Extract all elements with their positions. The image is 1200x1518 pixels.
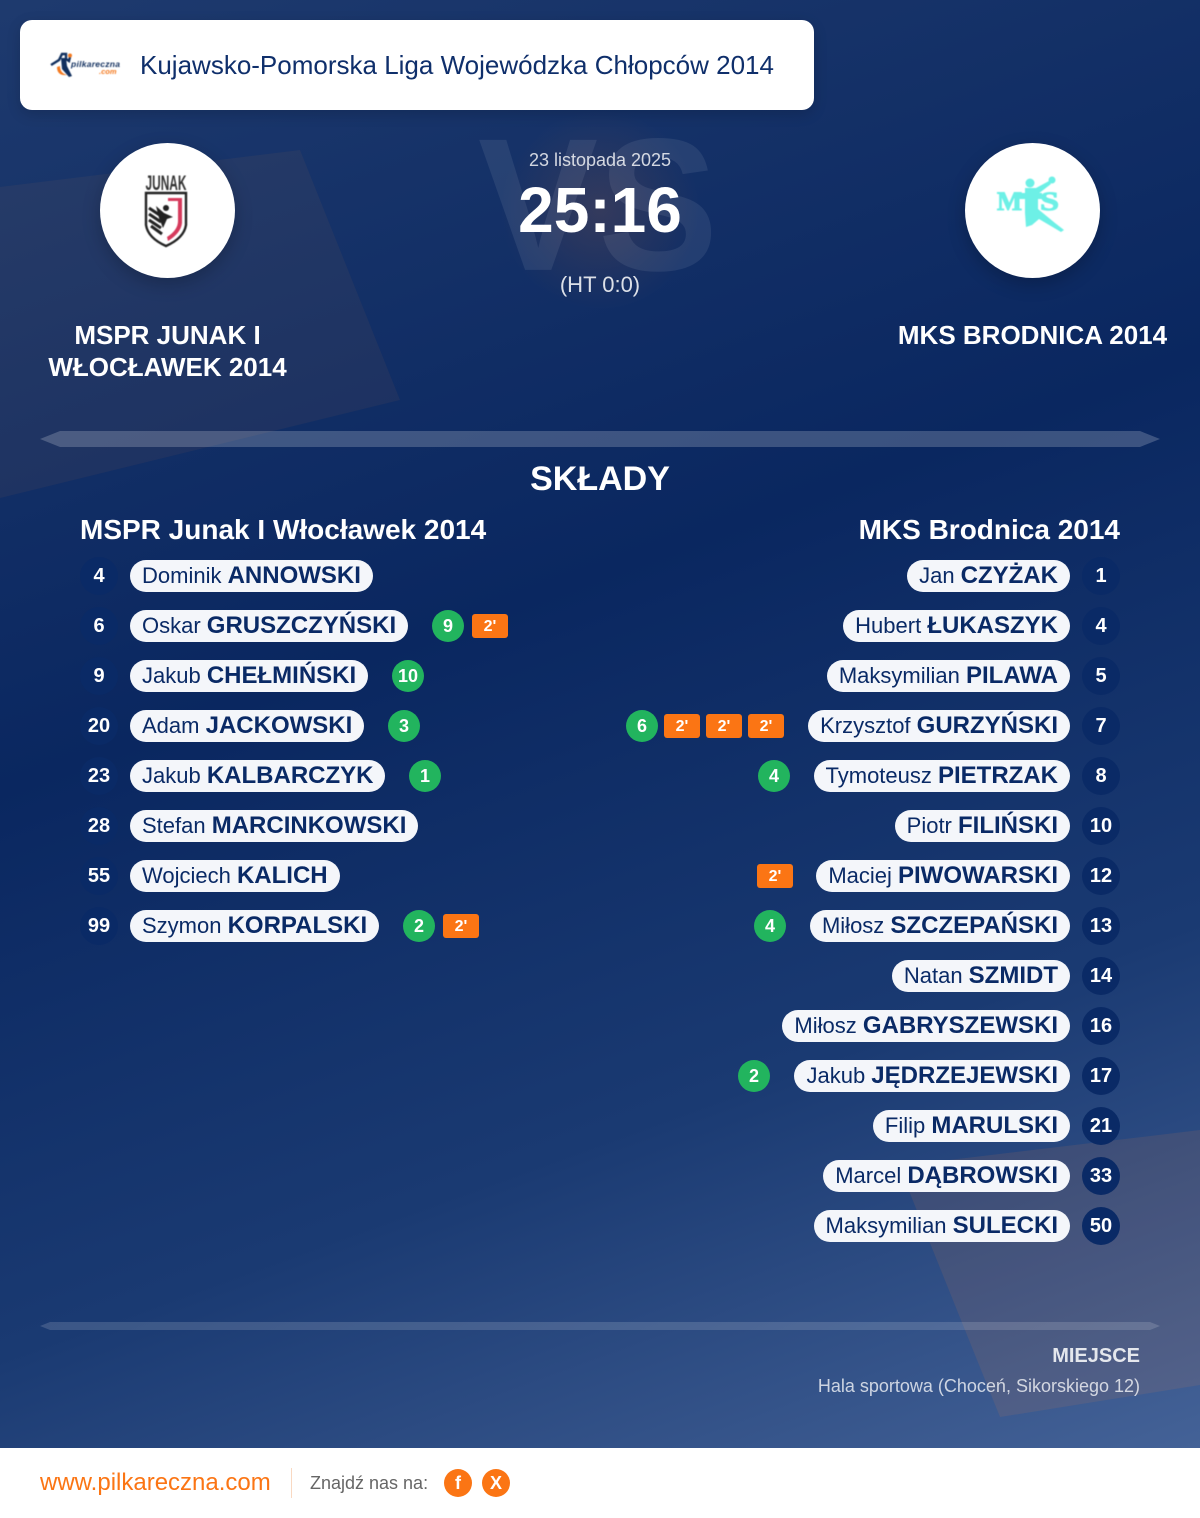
- player row: 4: [93, 565, 105, 587]
- player row: [88, 810, 418, 842]
- website: www.pilkareczna.com: [40, 1469, 271, 1496]
- player row: 23: [88, 765, 110, 787]
- player row: [626, 707, 1120, 745]
- player row: 5: [1095, 665, 1107, 687]
- half-time score: (HT 0:0): [560, 272, 640, 297]
- player row: [88, 710, 420, 742]
- player row: 2': [676, 718, 688, 735]
- player row: 1: [1095, 565, 1107, 587]
- player row: 1: [420, 766, 430, 786]
- player row: 50: [1090, 1215, 1112, 1237]
- logo: pilkareczna.com: .com: [99, 67, 117, 76]
- player row: [754, 907, 1120, 945]
- player row: Adam JACKOWSKI: [142, 712, 352, 739]
- player row: Maksymilian SULECKI: [826, 1212, 1058, 1239]
- player row: 4: [1095, 615, 1107, 637]
- player row: 33: [1090, 1165, 1112, 1187]
- player row: 2': [455, 918, 467, 935]
- player row: [757, 857, 1120, 895]
- player row: 14: [1090, 965, 1112, 987]
- player row: [873, 1107, 1120, 1145]
- player row: [738, 1057, 1120, 1095]
- player row: Dominik ANNOWSKI: [142, 562, 361, 589]
- player row: 2': [718, 718, 730, 735]
- player row: Miłosz SZCZEPAŃSKI: [822, 912, 1058, 939]
- player row: Filip MARULSKI: [885, 1112, 1058, 1139]
- player row: Jakub CHEŁMIŃSKI: [142, 662, 356, 689]
- player row: [782, 1007, 1120, 1045]
- player row: Natan SZMIDT: [904, 962, 1058, 989]
- player row: Marcel DĄBROWSKI: [835, 1162, 1058, 1189]
- away squad list: [626, 560, 1120, 1245]
- player row: 9: [93, 665, 105, 687]
- away squad heading: MKS Brodnica 2014: [859, 514, 1120, 545]
- player row: 99: [88, 915, 110, 937]
- player row: [93, 560, 373, 592]
- home squad list: [88, 560, 508, 942]
- player row: 21: [1090, 1115, 1112, 1137]
- icon: facebook: f: [455, 1473, 461, 1493]
- player row: Wojciech KALICH: [142, 862, 328, 889]
- player row: [814, 1207, 1120, 1245]
- player row: Tymoteusz PIETRZAK: [826, 762, 1058, 789]
- player row: 55: [88, 865, 110, 887]
- home team name: MSPR JUNAK I: [74, 320, 261, 350]
- player row: 2': [769, 868, 781, 885]
- player row: [895, 807, 1120, 845]
- venue text: Hala sportowa (Choceń, Sikorskiego 12): [818, 1376, 1140, 1396]
- player row: [907, 560, 1107, 592]
- divider bottom: [40, 1322, 1160, 1330]
- player row: Krzysztof GURZYŃSKI: [820, 712, 1058, 739]
- player row: Oskar GRUSZCZYŃSKI: [142, 612, 396, 639]
- player row: 20: [88, 715, 110, 737]
- player row: 7: [1095, 715, 1107, 737]
- icon: X: [482, 1469, 510, 1497]
- player row: [88, 760, 441, 792]
- player row: Maciej PIWOWARSKI: [828, 862, 1058, 889]
- player row: Stefan MARCINKOWSKI: [142, 812, 406, 839]
- follow label: Znajdź nas na:: [310, 1473, 428, 1493]
- player row: 28: [88, 815, 110, 837]
- away crest circle: [965, 143, 1100, 278]
- match date: 23 listopada 2025: [529, 150, 671, 170]
- away team name: MKS BRODNICA 2014: [898, 320, 1167, 350]
- player row: 2': [484, 618, 496, 635]
- player row: Jakub KALBARCZYK: [142, 762, 373, 789]
- player row: 6: [637, 716, 647, 736]
- score: 25:16: [518, 174, 682, 246]
- player row: Jan CZYŻAK: [919, 562, 1058, 589]
- player row: 13: [1090, 915, 1112, 937]
- player row: Miłosz GABRYSZEWSKI: [794, 1012, 1058, 1039]
- player row: 9: [443, 616, 453, 636]
- icon: X: X: [490, 1473, 502, 1493]
- player row: 3: [399, 716, 409, 736]
- footer: [0, 1448, 1200, 1518]
- icon: facebook: [444, 1469, 472, 1497]
- footer separator: [291, 1468, 292, 1498]
- icon: MKS crest: [996, 176, 1064, 232]
- player row: 6: [93, 615, 105, 637]
- player row: [758, 757, 1120, 795]
- icon: Junak crest: [144, 172, 188, 248]
- player row: Maksymilian PILAWA: [839, 662, 1058, 689]
- player row: 8: [1095, 765, 1107, 787]
- home team name: [48, 320, 287, 382]
- header card: [20, 20, 814, 110]
- player row: 10: [1090, 815, 1112, 837]
- player row: 2: [414, 916, 424, 936]
- player row: 4: [769, 766, 779, 786]
- player row: 17: [1090, 1065, 1112, 1087]
- player row: 4: [765, 916, 775, 936]
- player row: [827, 657, 1120, 695]
- home crest circle: [100, 143, 235, 278]
- player row: 10: [398, 666, 418, 686]
- player row: Szymon KORPALSKI: [142, 912, 367, 939]
- icon: MKS crest: S: [1040, 187, 1059, 216]
- icon: MKS crest: M: [997, 187, 1022, 216]
- player row: [843, 610, 1107, 644]
- player row: [88, 910, 479, 942]
- home squad heading: MSPR Junak I Włocławek 2014: [80, 514, 486, 545]
- player row: 16: [1090, 1015, 1112, 1037]
- player row: [88, 860, 340, 892]
- home team name: WŁOCŁAWEK 2014: [48, 352, 287, 382]
- logo: pilkareczna.com: pilkareczna: [70, 59, 120, 69]
- player row: 12: [1090, 865, 1112, 887]
- player row: [823, 1157, 1120, 1195]
- player row: 2: [749, 1066, 759, 1086]
- section heading: SKŁADY: [530, 460, 670, 498]
- divider top: [40, 431, 1160, 447]
- player row: [93, 660, 424, 692]
- VS watermark: VS: [478, 100, 718, 311]
- player row: Piotr FILIŃSKI: [907, 812, 1058, 839]
- logo: pilkareczna.com: [50, 52, 120, 78]
- player row: Hubert ŁUKASZYK: [855, 612, 1058, 639]
- player row: [892, 957, 1120, 995]
- player row: 2': [760, 718, 772, 735]
- venue label: MIEJSCE: [1052, 1345, 1140, 1367]
- player row: Jakub JĘDRZEJEWSKI: [806, 1062, 1058, 1089]
- league title: Kujawsko-Pomorska Liga Wojewódzka Chłopców 2014: [140, 50, 774, 80]
- player row: [93, 610, 508, 642]
